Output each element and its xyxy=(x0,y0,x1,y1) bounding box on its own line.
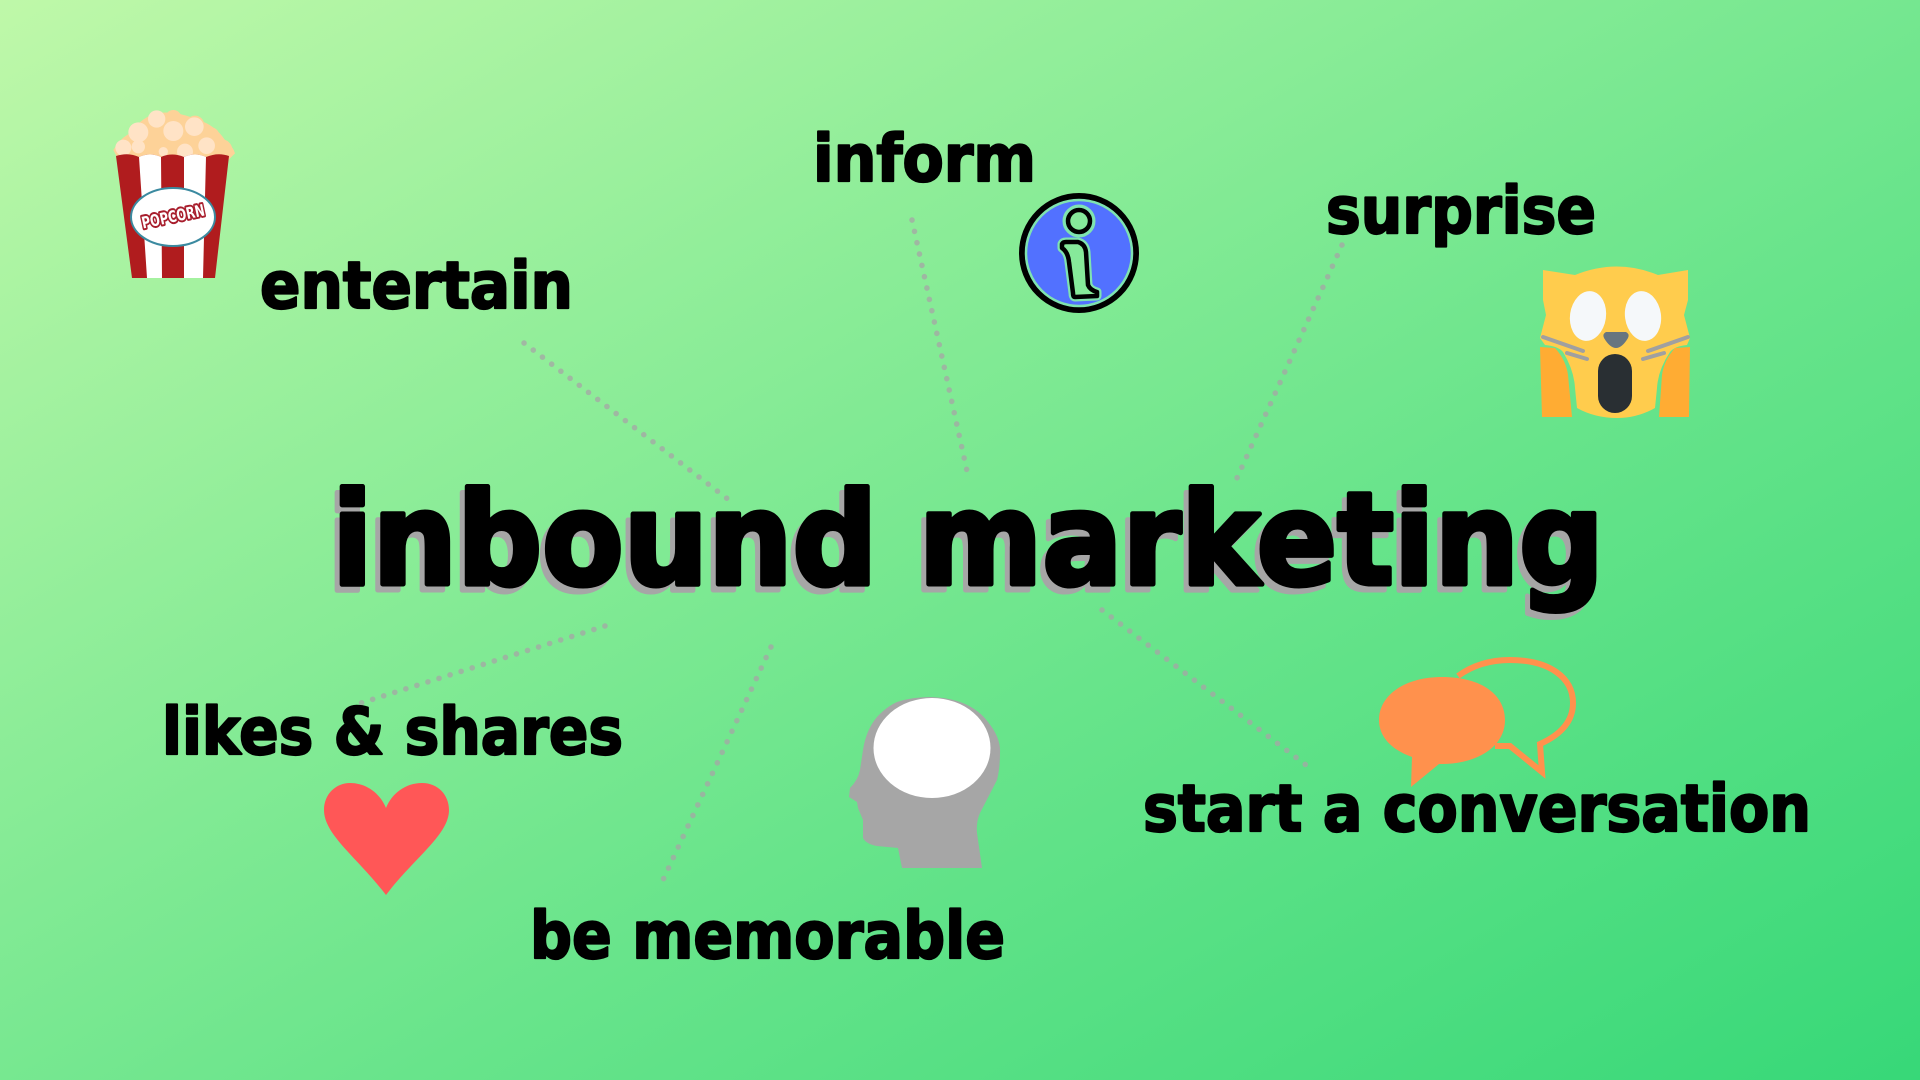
cat mouth xyxy=(1598,354,1632,413)
label: likes and shares: likes & shares xyxy=(162,695,623,770)
letter i stem xyxy=(1062,242,1097,297)
icon: heart xyxy=(324,783,449,895)
brain area xyxy=(874,698,990,798)
icon: screaming cat xyxy=(1540,266,1690,418)
cat right hand xyxy=(1659,347,1690,417)
popcorn kernels xyxy=(113,110,235,161)
label: surprise: surprise xyxy=(1326,174,1596,249)
icon: info badge xyxy=(1022,196,1136,310)
label: inform: inform xyxy=(813,122,1036,197)
cat face xyxy=(1540,266,1690,418)
oval label xyxy=(131,188,215,246)
popcorn word: POPCORN xyxy=(140,201,206,232)
arrow: dotted line to start a conversation xyxy=(1102,610,1306,765)
arrow: dotted line to be memorable xyxy=(663,647,771,880)
outline bubble xyxy=(1458,660,1573,772)
label: start a conversation: start a conversation xyxy=(1143,772,1811,847)
icon: head silhouette xyxy=(849,697,1000,868)
box body xyxy=(116,154,229,278)
label: be memorable: be memorable xyxy=(530,899,1005,974)
letter i dot xyxy=(1067,209,1091,233)
cat nose xyxy=(1603,332,1629,348)
box stripes xyxy=(139,154,206,278)
cat whiskers xyxy=(1543,337,1688,359)
cat left hand xyxy=(1540,347,1572,417)
icon: chat bubbles xyxy=(1379,660,1573,787)
arrow: dotted line to likes and shares xyxy=(361,626,605,703)
arrow: dotted line to surprise xyxy=(1237,245,1342,478)
label: entertain: entertain xyxy=(260,249,573,324)
arrow: dotted line to inform xyxy=(912,220,967,471)
cat eyes xyxy=(1567,289,1664,343)
arrow: dotted line to entertain xyxy=(524,343,729,500)
filled bubble xyxy=(1379,677,1505,787)
icon: popcorn box xyxy=(113,110,235,278)
title: inbound marketing xyxy=(332,466,1604,615)
title: inbound marketing xyxy=(327,472,1599,621)
